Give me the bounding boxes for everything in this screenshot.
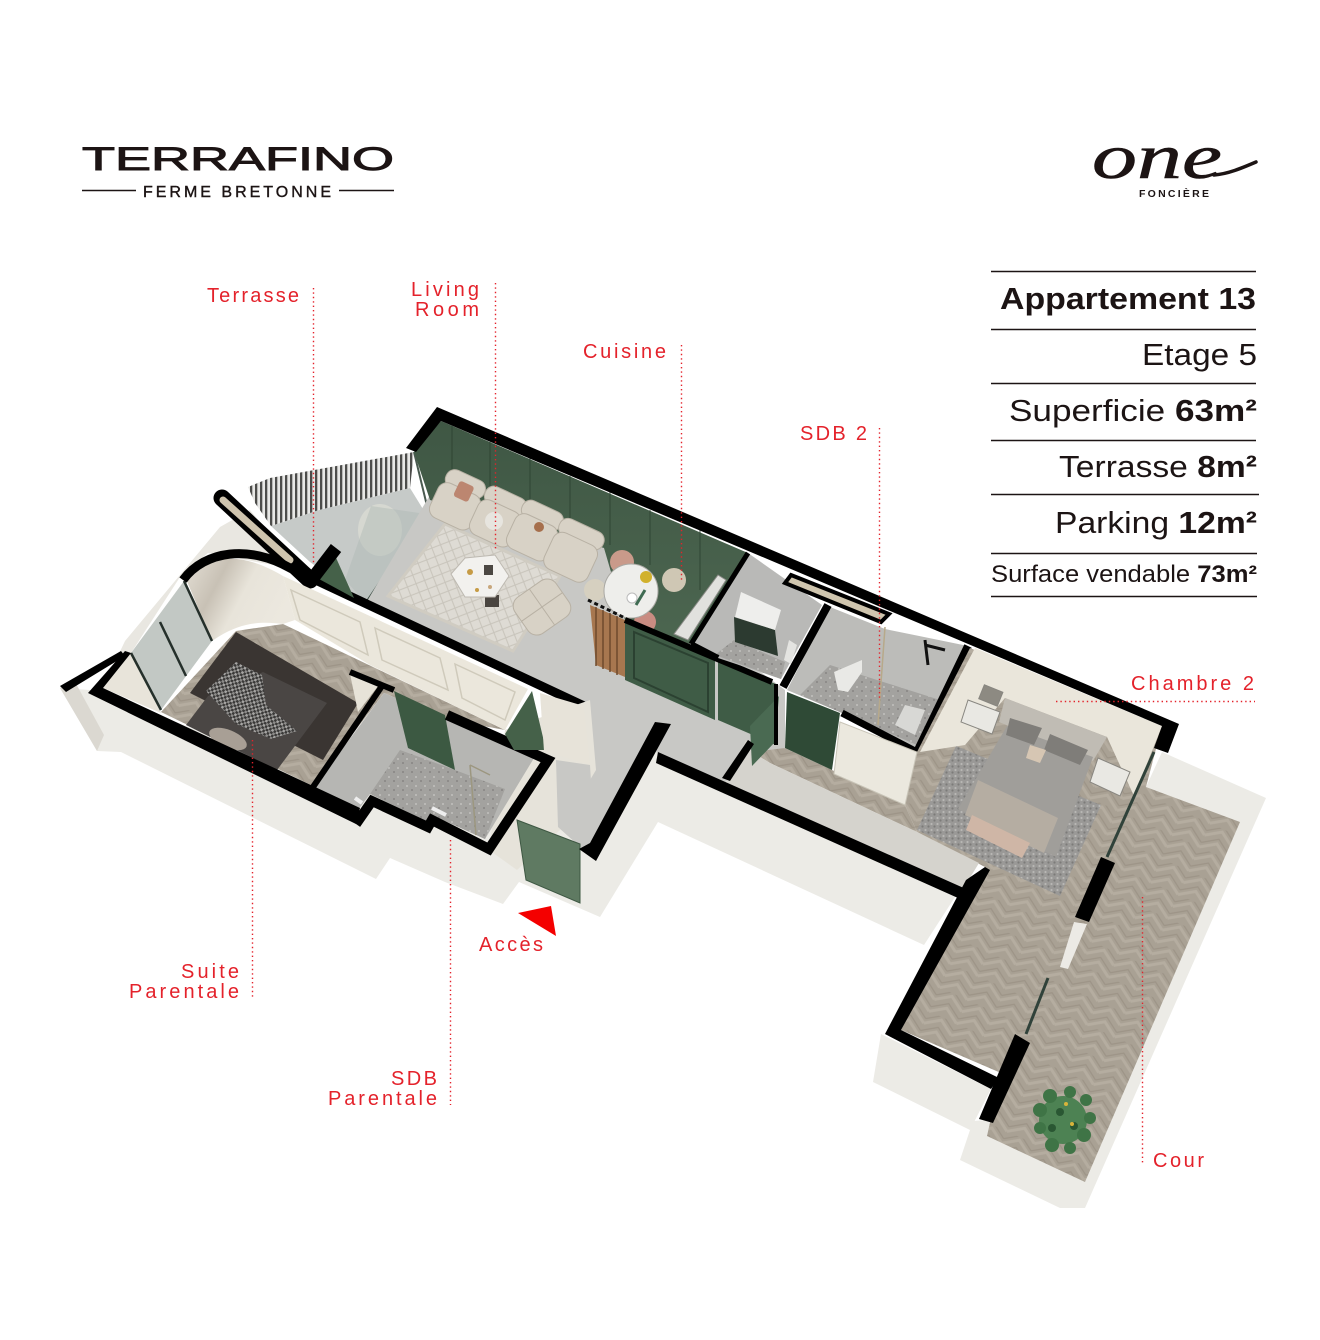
exterior walls (60, 510, 1266, 1208)
vanity (734, 592, 781, 656)
access arrow (518, 906, 556, 936)
suite parentale room (103, 559, 528, 786)
interior wall below window (103, 653, 161, 713)
coffee table (451, 555, 509, 607)
label: SDB Parentale: Parentale (328, 1088, 437, 1110)
terrace (248, 452, 428, 603)
green paneled wall (414, 421, 748, 644)
label: SDB Parentale: SDB (391, 1068, 437, 1090)
cream threshold strip (726, 740, 979, 891)
bathroom door (394, 691, 455, 770)
label: Living Room (411, 279, 479, 321)
hallway floor strip (752, 748, 917, 832)
bedroom and courtyard floor (726, 648, 1240, 1182)
structural black walls (406, 407, 1179, 1089)
suite exterior wall (60, 651, 360, 824)
label: Suite Parentale: Suite (181, 961, 239, 983)
tree (1033, 1086, 1096, 1154)
label: SDB Parentale (328, 1068, 437, 1110)
hallway cream backing (489, 700, 596, 870)
bedroom rug (917, 746, 1101, 896)
entry door (517, 820, 580, 903)
suite bathroom (313, 672, 548, 849)
wood slat screen (588, 600, 625, 677)
logo: One Foncière: FONCIÈRE (1139, 187, 1209, 200)
green kitchen partition and doors (625, 620, 776, 745)
green terrace door (313, 548, 354, 598)
row: saleable area: Surface vendable 73m² (991, 561, 1257, 588)
info table (991, 272, 1259, 596)
bedroom wall panels (920, 648, 1162, 796)
bathroom 2 (691, 553, 889, 679)
kitchen counter (674, 575, 726, 640)
row: terrace: Terrasse 8m² (1059, 449, 1257, 484)
wall: curved top (183, 554, 584, 706)
shower (878, 627, 945, 735)
row: apartment: Appartement 13 (1000, 281, 1256, 316)
logo: One Foncière (1092, 121, 1256, 200)
toilet (784, 640, 797, 664)
label: Suite Parentale: Parentale (129, 981, 239, 1003)
label: Cour: Cour (1153, 1150, 1204, 1172)
label: Cuisine: Cuisine (583, 341, 666, 363)
dining set (584, 550, 686, 633)
rug (388, 524, 560, 651)
living room floor (366, 495, 785, 861)
label: Living Room: Living (411, 279, 479, 301)
shower glass (470, 765, 490, 835)
bed (958, 698, 1107, 858)
railing (248, 452, 414, 526)
window box (785, 575, 889, 622)
toilet (834, 660, 862, 692)
row: area: Superficie 63m² (1009, 393, 1257, 428)
curved wall (186, 559, 295, 641)
suite bed (186, 662, 327, 770)
row: floor: Etage 5 (1142, 337, 1257, 372)
window (131, 581, 212, 710)
floor plan (60, 407, 1266, 1208)
paneled wall (283, 576, 528, 730)
ottoman (509, 575, 575, 639)
label: Chambre 2: Chambre 2 (1131, 673, 1254, 695)
label: SDB 2: SDB 2 (800, 423, 867, 445)
cushions (453, 480, 544, 532)
logo: Terrafino: TERRAFINO (82, 141, 394, 177)
green doors hallway (750, 684, 840, 770)
row: parking: Parking 12m² (1055, 505, 1257, 540)
label: Suite Parentale (129, 961, 239, 1003)
nightstands (961, 685, 1130, 796)
label: Living Room: Room (415, 299, 479, 321)
label: Terrasse: Terrasse (207, 285, 299, 307)
logo: Terrafino: FERME BRETONNE (143, 184, 331, 201)
lounge chair (358, 504, 402, 556)
glass divider and wall piers (979, 752, 1154, 1123)
room rug (190, 632, 358, 760)
hallway walls and door (505, 691, 596, 903)
logo: One Foncière: one (1092, 121, 1222, 192)
label: Accès: Accès (479, 934, 543, 956)
logo: Terrafino (82, 141, 394, 201)
bathroom 1 shower room (783, 605, 968, 752)
wall: terrace diagonal (222, 498, 310, 580)
leader lines (252, 283, 1255, 1165)
glass door (345, 506, 426, 603)
sofa (426, 466, 607, 586)
